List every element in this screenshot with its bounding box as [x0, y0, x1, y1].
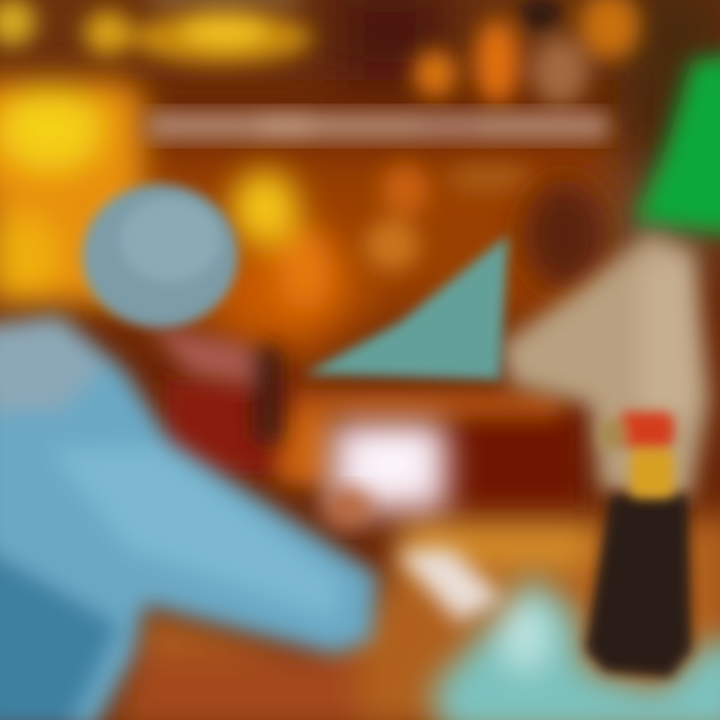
background: warm wall and shelves: [0, 0, 720, 360]
lamp glow: centre yellow: [231, 170, 333, 312]
table top: warm wood: [115, 515, 720, 720]
table: red counter: [165, 380, 580, 510]
white paper on table: [330, 422, 448, 512]
woman's body: light blue shirt: [0, 315, 378, 720]
shelf: pale horizontal band: [145, 112, 610, 140]
bottle: dark cola bottle: [585, 495, 692, 678]
bottle label: red and yellow: [600, 412, 674, 498]
woman's head: grey-blue cap: [82, 184, 238, 328]
ceiling lamps: [0, 0, 312, 64]
neck and face: woman, reddish: [150, 325, 284, 445]
man's torso: beige shirt: [500, 232, 710, 500]
green tree: [635, 55, 720, 235]
teal cloth: [430, 575, 720, 720]
shelf bottles and small lights: [364, 0, 640, 271]
hand near paper: [324, 488, 372, 528]
paper sheet on table: [395, 548, 505, 622]
wall lamp: large yellow glow on left: [0, 80, 145, 305]
teal triangular menu: [305, 235, 508, 380]
man's dark hair: [523, 180, 607, 290]
